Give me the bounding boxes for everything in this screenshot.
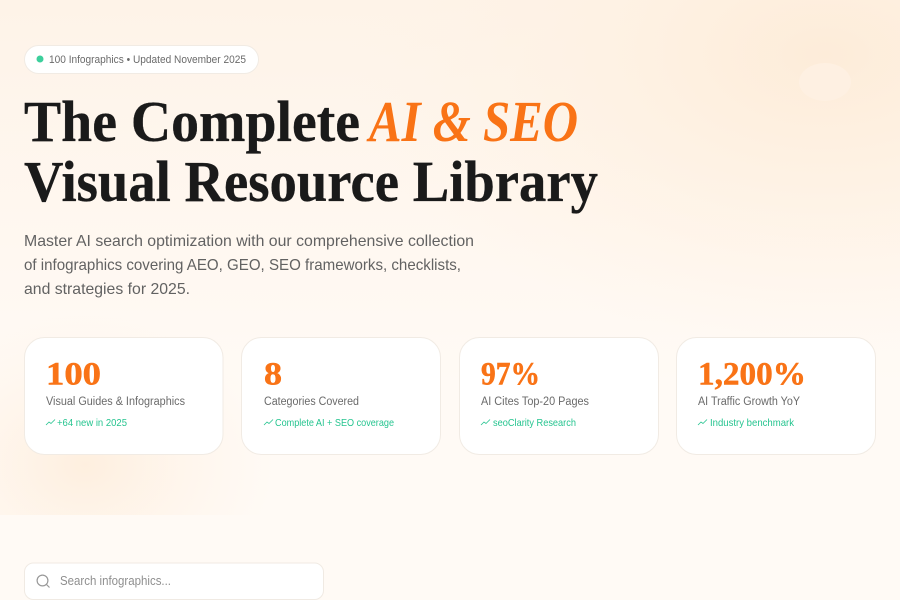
search box: [24, 563, 324, 600]
stat card: infographics count: 100: [46, 356, 101, 392]
badge: update status: [24, 46, 258, 74]
icon: trend line: [481, 420, 490, 425]
stat card: traffic growth: 1,200%: [698, 356, 806, 392]
icon: trend line: [264, 420, 273, 425]
stat card: AI citations: [460, 338, 658, 454]
badge text: 100 Infographics • Updated November 2025: [49, 54, 246, 66]
stat card: traffic growth: AI Traffic Growth YoY: [698, 396, 800, 408]
stat card: infographics count: Visual Guides & Infographics: [46, 396, 185, 408]
stat card: categories: Categories Covered: [264, 396, 359, 408]
stat card: infographics count: +64 new in 2025: [57, 417, 127, 429]
stat card: categories: Complete AI + SEO coverage: [275, 417, 394, 429]
intro paragraph: and strategies for 2025.: [24, 281, 190, 298]
icon: trend line: [46, 420, 55, 425]
intro paragraph: [24, 233, 474, 298]
stat card: traffic growth: Industry benchmark: [710, 417, 795, 429]
intro paragraph: Master AI search optimization with our comprehensive collection: [24, 233, 474, 250]
stat card: AI citations: 97%: [481, 356, 540, 392]
stat card: infographics count: [24, 338, 223, 454]
title: [24, 89, 598, 214]
icon: status dot: [36, 56, 44, 62]
stat card: AI citations: seoClarity Research: [493, 417, 576, 429]
stat card: AI citations: AI Cites Top-20 Pages: [481, 396, 589, 408]
title: The Complete: [24, 89, 360, 154]
stat card: categories: 8: [264, 356, 282, 392]
icon: trend line: [698, 420, 707, 425]
icon: search: [37, 575, 50, 588]
title: Visual Resource Library: [24, 149, 598, 214]
title: AI & SEO: [366, 89, 578, 154]
stat card: categories: [242, 338, 440, 454]
stat card: traffic growth: [676, 338, 876, 454]
intro paragraph: of infographics covering AEO, GEO, SEO frameworks, checklists,: [24, 257, 461, 274]
search placeholder: Search infographics...: [60, 574, 171, 588]
